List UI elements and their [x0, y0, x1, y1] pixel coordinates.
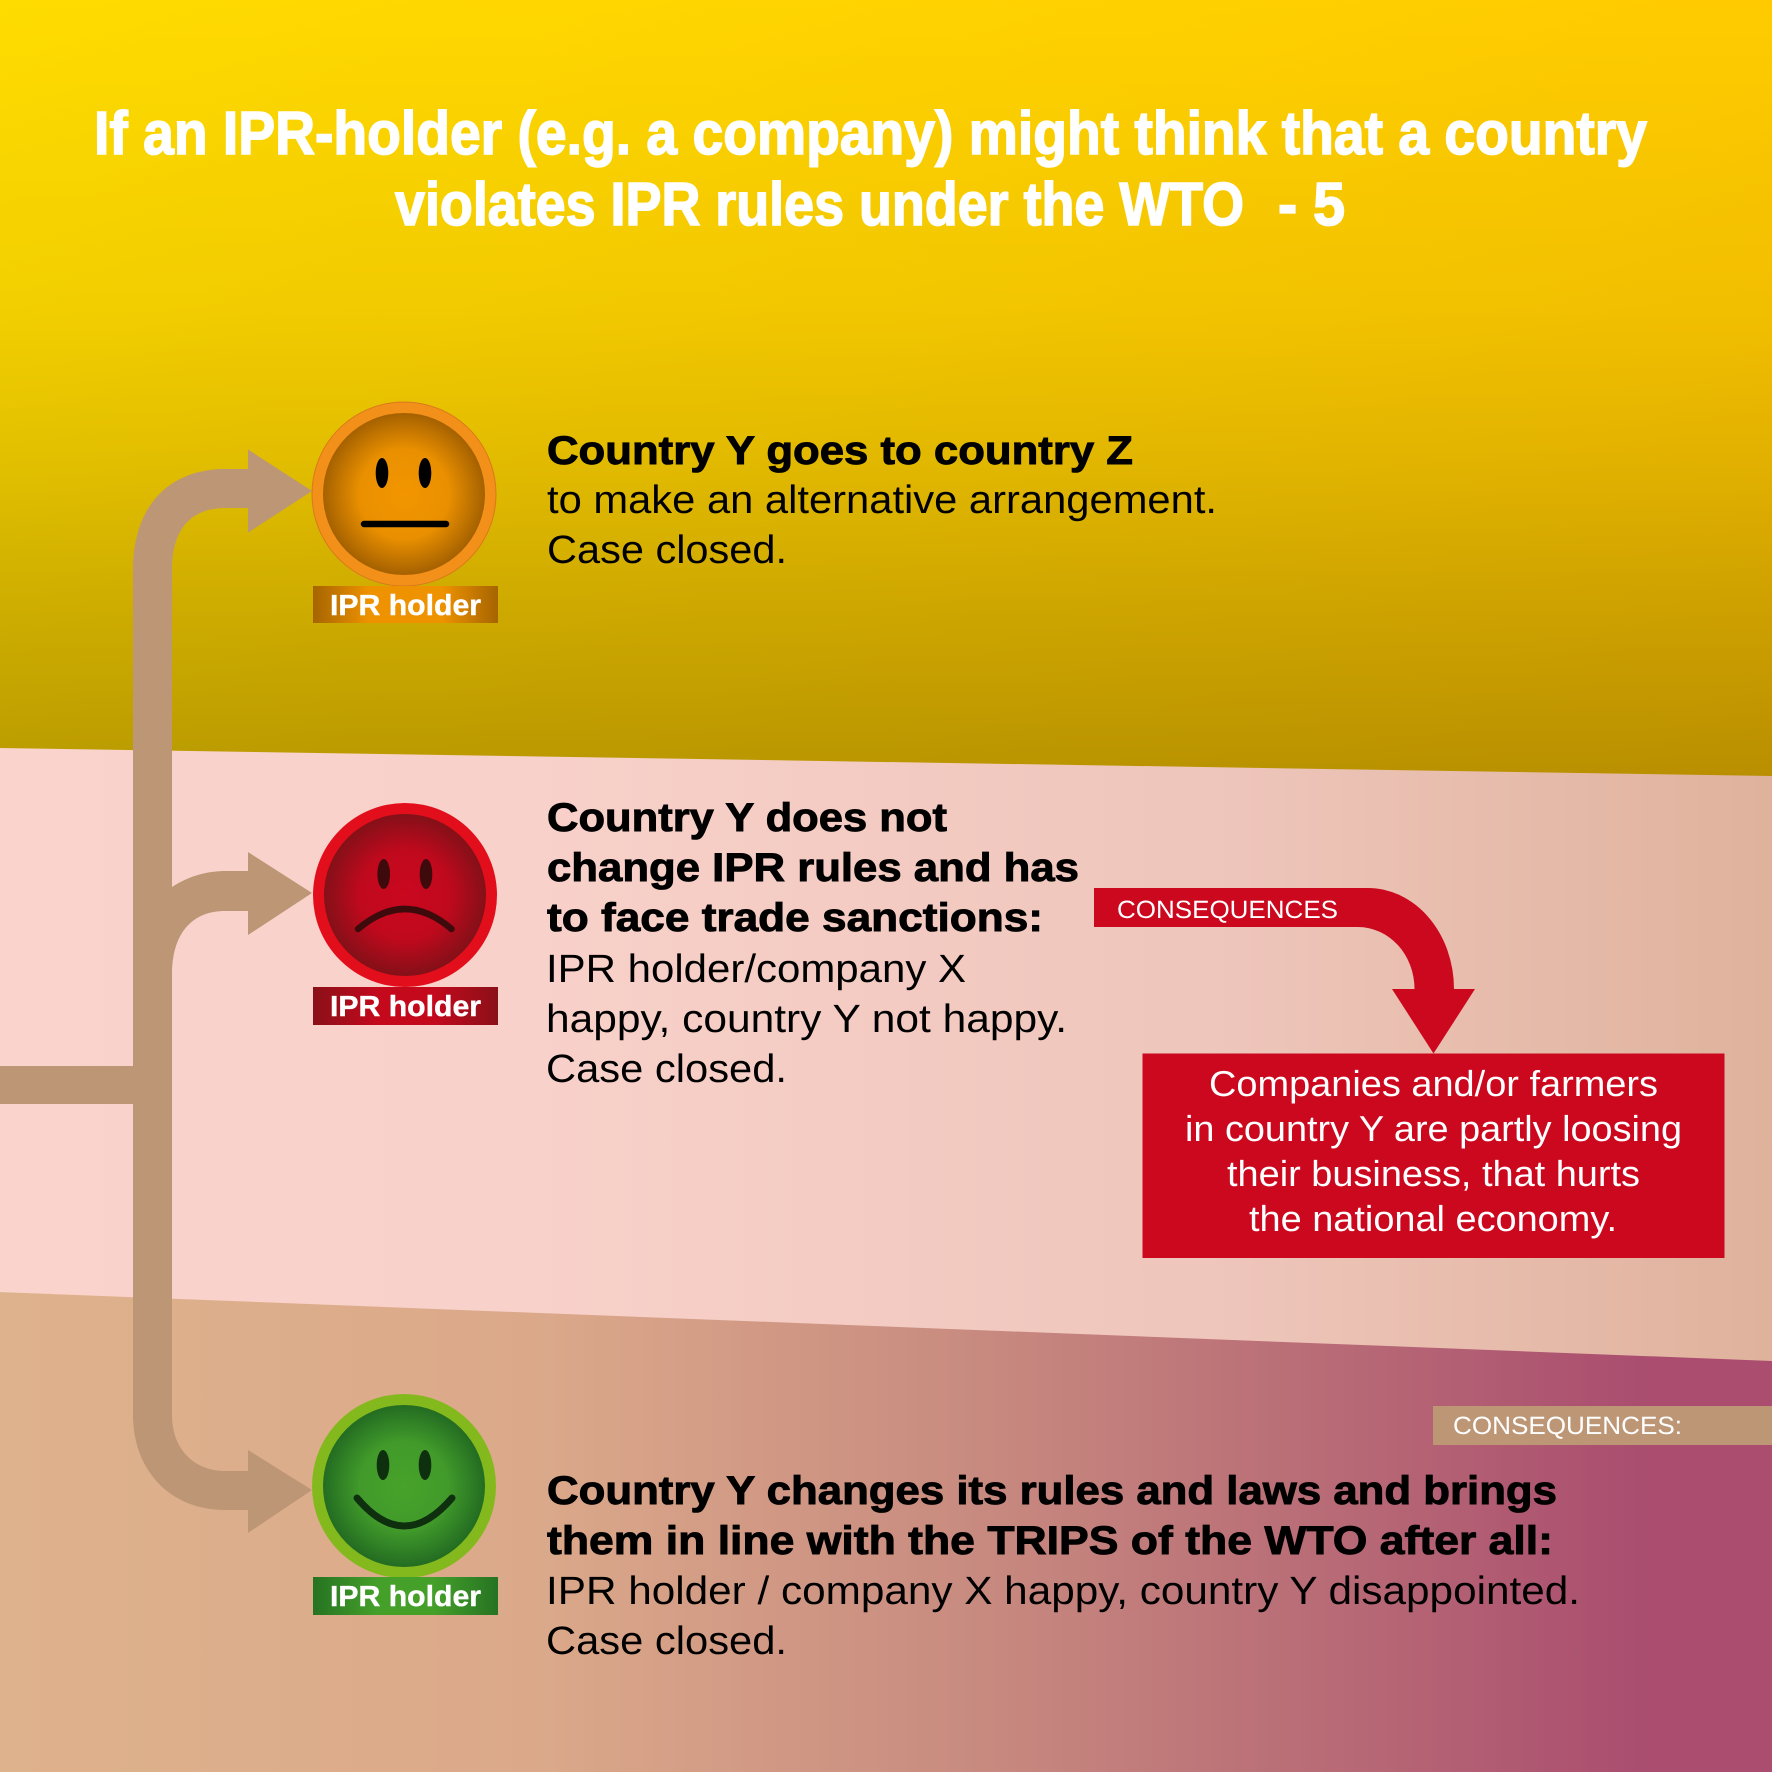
text block: country Y does not change rules: change IPR rules and has	[547, 846, 1079, 890]
label: IPR holder happy	[313, 1577, 498, 1615]
text block: country Y changes its rules	[546, 1469, 1580, 1663]
text block: country Y changes its rules: Country Y changes its rules and laws and brings	[547, 1469, 1557, 1513]
callout: red consequences box: their business, that hurts	[1227, 1153, 1640, 1194]
arrow: branch to happy face	[133, 1415, 312, 1533]
text block: country Y does not change rules: happy, country Y not happy.	[546, 997, 1067, 1041]
label: IPR holder neutral	[313, 586, 498, 623]
text block: country Y goes to country Z: to make an alternative arrangement.	[547, 478, 1217, 522]
callout: red consequences box	[1142, 1054, 1724, 1258]
arrow: red consequences arrow: CONSEQUENCES	[1117, 896, 1338, 924]
panel: pink background band	[0, 748, 1772, 1365]
label: IPR holder happy: IPR holder	[330, 1581, 481, 1613]
arrow: red consequences arrow	[1094, 888, 1475, 1054]
text block: country Y changes its rules: Case closed.	[546, 1619, 787, 1663]
title	[94, 99, 1647, 238]
callout: red consequences box: in country Y are partly loosing	[1185, 1108, 1682, 1149]
arrow: branch to neutral face	[133, 450, 312, 570]
text block: country Y does not change rules: Case closed.	[546, 1047, 787, 1091]
icon: neutral face	[312, 402, 496, 586]
icon: happy face	[312, 1394, 496, 1578]
text block: country Y does not change rules	[546, 796, 1079, 1091]
text block: country Y goes to country Z: Case closed.	[547, 528, 787, 572]
text block: country Y changes its rules: them in line with the TRIPS of the WTO after all:	[547, 1519, 1553, 1563]
text block: country Y goes to country Z	[547, 429, 1217, 572]
icon: sad face	[313, 803, 497, 987]
text block: country Y changes its rules: IPR holder / company X happy, country Y disappointed.	[546, 1569, 1580, 1613]
arrow: incoming bar and main trunk	[0, 560, 172, 1420]
text block: country Y does not change rules: IPR holder/company X	[546, 947, 966, 991]
label: IPR holder neutral: IPR holder	[330, 590, 481, 622]
panel: tan to plum background band	[0, 1292, 1772, 1772]
callout: red consequences box: the national economy.	[1249, 1198, 1617, 1239]
title: violates IPR rules under the WTO	[395, 170, 1244, 238]
title: If an IPR-holder (e.g. a company) might think that a country	[94, 99, 1647, 167]
panel: yellow background band	[0, 0, 1772, 780]
text block: country Y does not change rules: Country Y does not	[547, 796, 947, 840]
title: - 5	[1278, 170, 1345, 238]
label: consequences tag: CONSEQUENCES:	[1453, 1412, 1682, 1440]
label: IPR holder sad	[313, 987, 498, 1025]
text block: country Y goes to country Z: Country Y goes to country Z	[547, 429, 1133, 473]
callout: red consequences box: Companies and/or farmers	[1209, 1063, 1658, 1104]
arrow: branch to sad face	[133, 852, 312, 1000]
text block: country Y does not change rules: to face trade sanctions:	[547, 896, 1043, 940]
label: consequences tag	[1433, 1406, 1772, 1445]
label: IPR holder sad: IPR holder	[330, 991, 481, 1023]
